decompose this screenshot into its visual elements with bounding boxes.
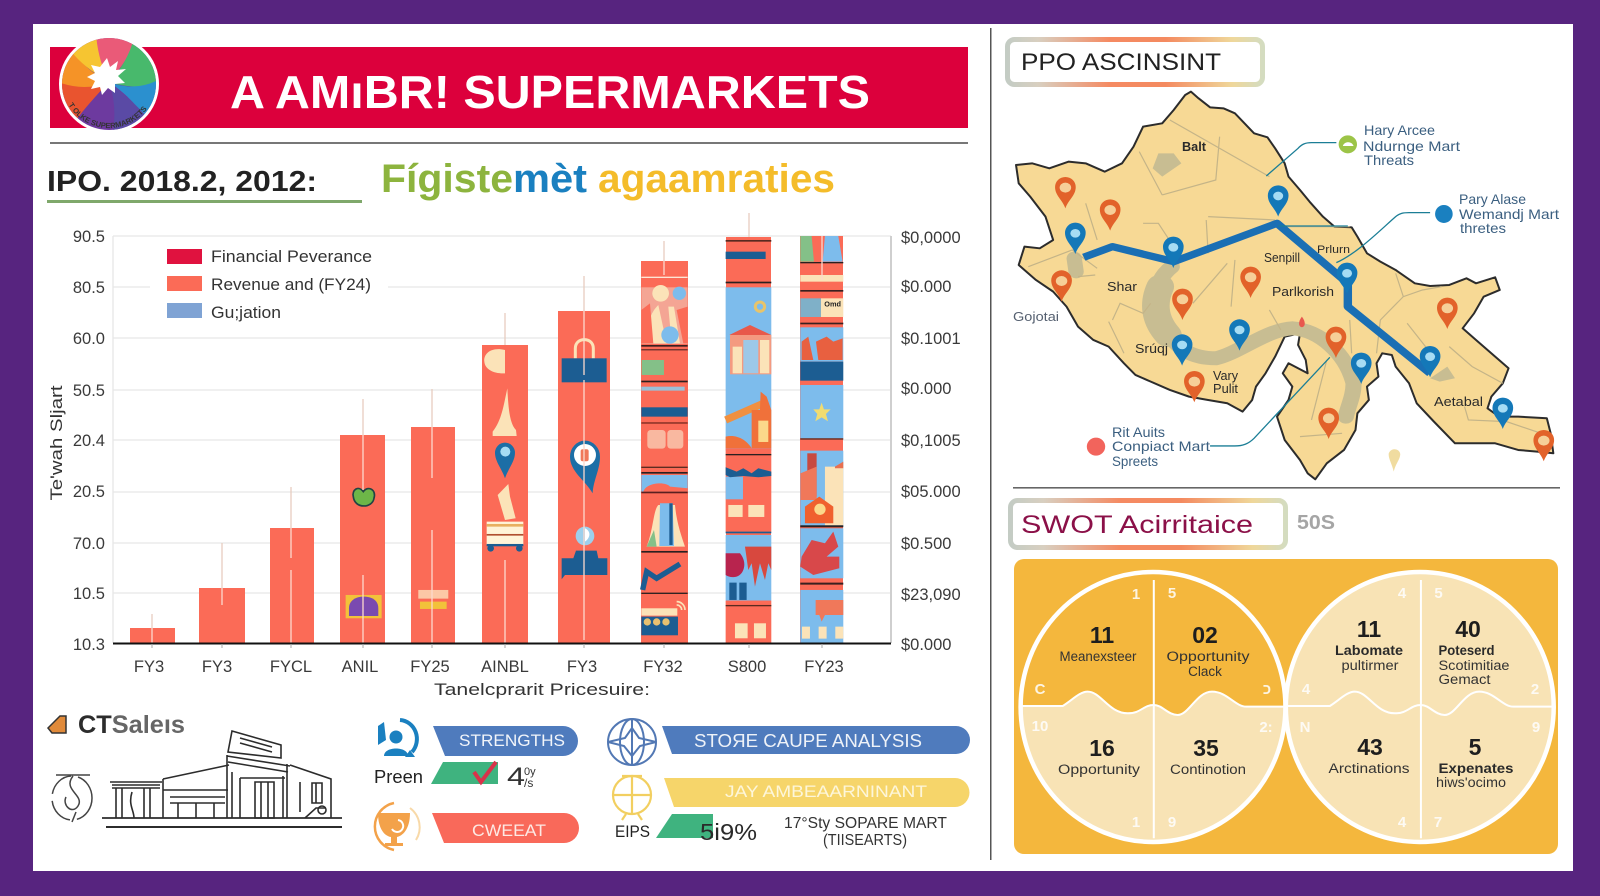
transit route [1084,223,1430,373]
stat value [507,763,536,791]
callout text: green: Hary Arcee [1364,122,1435,138]
strengths banner [433,726,578,756]
store analysis banner [662,726,970,754]
small edge numbers: 2 [1531,681,1539,698]
EIPS value: 5i9% [700,819,757,845]
store analysis banner: STOЯE CAUPE ANALYSIS [694,731,922,751]
icon: orange goblet [375,803,420,850]
callout text: red [1112,424,1210,469]
y axis title: Te'wah Sljart [47,385,66,501]
map place labels: Senpill [1264,250,1300,265]
icon: yellow globe [613,776,651,820]
SWOT heading [1010,500,1286,548]
x axis labels: ANIL [342,658,378,676]
rivers and land patches [1074,258,1354,417]
right circle values: Arctinations [1328,761,1410,776]
right axis labels: $0,1005 [901,432,961,450]
right axis labels: $0.500 [901,535,951,553]
map heading [1008,40,1262,84]
right axis labels: $0.000 [901,380,951,398]
right circle values: hiws'ocimo [1436,775,1506,790]
store caption [784,815,948,849]
callout dots [1339,135,1357,153]
callout text: blue: Wemandj Mart [1459,206,1559,222]
mosaic bars [641,236,843,643]
small edge numbers: 5 [1168,585,1176,602]
right circle values: Scotimitiae [1438,658,1510,673]
small edge numbers: כ [1263,681,1271,698]
plain bars [130,236,843,643]
icon: person [378,720,417,757]
right circle values: Labomate [1335,643,1404,658]
y axis labels: 60.0 [73,330,105,348]
map [1013,92,1559,479]
right circle values: 43 [1357,734,1383,760]
title: A AMıBR! SUPERMARKETS [230,66,870,118]
icon: swirl emblem [52,775,92,822]
y axis labels: 50.5 [73,382,105,400]
heading: coloured subtitle: Fígiste [381,157,513,201]
x axis labels [134,658,844,676]
CT Sales block [48,711,342,827]
x axis labels: FY23 [804,658,844,676]
right axis labels [901,229,961,654]
threat row [375,803,579,850]
small edge numbers: 5 [1434,585,1443,602]
y axis labels: 20.4 [73,432,105,450]
Preen label: Preen [374,767,423,787]
column divider [990,28,992,860]
error whiskers [152,213,822,643]
icon: blue globe [608,719,656,765]
road network [1028,120,1541,437]
right axis labels: $0.1001 [901,330,961,348]
SWOT panel [1013,559,1560,854]
store analysis row [608,719,970,849]
left circle values: 11 [1090,622,1114,648]
mosaic bar S800 [726,240,771,643]
x axis labels: FY25 [410,658,450,676]
callout text: red: Spreets [1112,453,1158,469]
mosaic bar FY23 [800,236,843,643]
icon: rainbow logo: T OLKE SUPERMARKETS [69,102,146,128]
mosaic bar FY32 [641,277,688,635]
chart baseline [113,644,891,648]
callout text: green [1363,122,1460,168]
threat banner: CWEEAT [472,821,546,840]
x axis title: Tanelcprarit Pricesuire: [434,680,650,699]
section rule [1013,487,1560,489]
x axis labels: S800 [728,658,766,676]
map place labels: Gojotai [1013,309,1059,324]
stat value: 0y [524,766,536,778]
small edge numbers: N [1300,719,1310,736]
small map markers [1299,317,1305,327]
stat value: /s [524,776,533,790]
small edge numbers: 9 [1168,814,1176,831]
right circle values: Poteserd [1438,643,1494,658]
callout text: blue: Pary Alase [1459,191,1526,207]
cream marker [1389,449,1400,472]
y axis labels: 10.5 [73,585,105,603]
callout text: red: Conpiact Mart [1112,438,1210,454]
orange store pins [1051,177,1554,461]
left circle values [1058,622,1250,777]
bar icons FY columns 4 and 5 [346,488,448,618]
bar chart [47,213,961,699]
green EIPS bar [656,814,713,838]
strengths row [374,720,578,791]
left circle values: Clack [1188,664,1222,679]
icon: CT mark [48,716,66,733]
right circle values: 40 [1455,616,1481,642]
callout dot blue [1435,205,1453,223]
SWOT circles artwork [1013,567,1560,842]
right circle values: Gemact [1438,672,1491,687]
small edge numbers: 9 [1532,719,1540,736]
store caption: 17°Sty SOPARE MART [784,815,948,832]
y axis labels: 90.5 [73,228,105,246]
x axis labels: FY32 [643,658,683,676]
y axis labels: 20.5 [73,483,105,501]
callout text: blue: thretes [1460,220,1506,236]
legend: Gu;jation [211,303,281,322]
right circle [1281,572,1560,842]
y axis labels: 80.5 [73,279,105,297]
map place labels: Pulit [1213,381,1238,396]
heading: coloured subtitle [381,157,835,201]
icon: store line drawing [102,731,342,827]
threat banner [432,813,579,843]
small edge numbers: 4 [1302,681,1311,698]
map place labels: Prlurn [1317,244,1350,256]
small edge numbers: 4 [1398,585,1407,602]
blue store pins [1065,185,1513,429]
yellow banner [664,778,970,807]
legend: Revenue and (FY24) [211,275,371,294]
yellow banner: JAY AMBEAARNINANT [725,782,927,801]
CT sales heading: CTSaleıs [78,711,185,739]
small edge numbers: C [1035,681,1046,698]
left circle values: Opportunity [1058,762,1140,777]
strengths banner: STRENGTHS [459,731,565,750]
callout dot red [1087,438,1105,456]
green stat bar with check [431,762,498,784]
x axis labels: AINBL [481,658,529,676]
leader lines [1210,143,1430,446]
small edge numbers: 1 [1132,814,1140,831]
left circle values: Opportunity [1166,649,1250,664]
right circle values: Expenates [1438,761,1514,776]
stat value: 4 [507,763,525,791]
y axis labels: 10.3 [73,636,105,654]
store caption: (TIISEARTS) [823,832,907,849]
icon: rainbow logo [59,38,159,130]
right circle values [1328,616,1514,790]
x axis labels: FYCL [270,658,312,676]
small edge numbers: 4 [1398,814,1407,831]
legend: Financial Peverance [211,247,372,266]
y axis labels [73,228,105,654]
map heading: PPO ASCINSINT [1021,49,1221,76]
left circle values: 16 [1089,735,1115,761]
right axis labels: $0.000 [901,636,951,654]
x axis labels: FY3 [202,658,232,676]
right circle values: 11 [1357,616,1381,642]
heading: IPO date: IPO. 2018.2, 2012: [47,166,317,198]
map place labels: Shar [1107,279,1138,294]
legend [150,240,388,326]
header banner [50,47,968,128]
small edge numbers: 1 [1132,586,1140,603]
small edge numbers: 7 [1434,814,1442,831]
callout text: blue [1459,191,1559,236]
map place labels [1013,139,1483,409]
bar icons FY columns 6 and 7 [484,340,607,579]
right axis labels: $23,090 [901,586,961,604]
callout text: red: Rit Auits [1112,424,1165,440]
left circle values: 02 [1192,622,1218,648]
small edge numbers: 10 [1032,718,1048,735]
x axis labels: FY3 [134,658,164,676]
SWOT side label: 50S [1297,512,1335,534]
left circle values: Continotion [1170,762,1246,777]
right circle values: 5 [1469,734,1482,760]
left circle values: Meanexsteer [1060,649,1137,664]
region outline [1016,92,1553,479]
map place labels: Balt [1182,139,1207,154]
callout text: green: Ndurnge Mart [1363,138,1460,154]
left circle [1013,567,1292,842]
heading: coloured subtitle: mèt [513,157,587,201]
map place labels: Vary [1213,368,1238,383]
right axis labels: $0,0000 [901,229,961,247]
right axis labels: $05.000 [901,483,961,501]
callout text: green: Threats [1364,152,1414,168]
x axis labels: FY3 [567,658,597,676]
small edge numbers [1032,585,1540,831]
EIPS label: EIPS [615,822,650,841]
small edge numbers: 2: [1259,719,1273,736]
y axis labels: 70.0 [73,535,105,553]
header rule [50,142,968,144]
SWOT heading: SWOT Acirritaice [1021,511,1253,539]
left circle values: 35 [1193,735,1219,761]
right circle values: pultirmer [1342,658,1399,673]
heading: coloured subtitle: agaamraties [598,157,835,201]
map place labels: Parlkorish [1272,284,1334,299]
map place labels: Srúqj [1135,341,1168,356]
mosaic bar FY23: Omd [824,300,841,309]
right axis labels: $0.000 [901,278,951,296]
heading: IPO date [47,166,362,203]
map place labels: Aetabal [1434,394,1483,409]
